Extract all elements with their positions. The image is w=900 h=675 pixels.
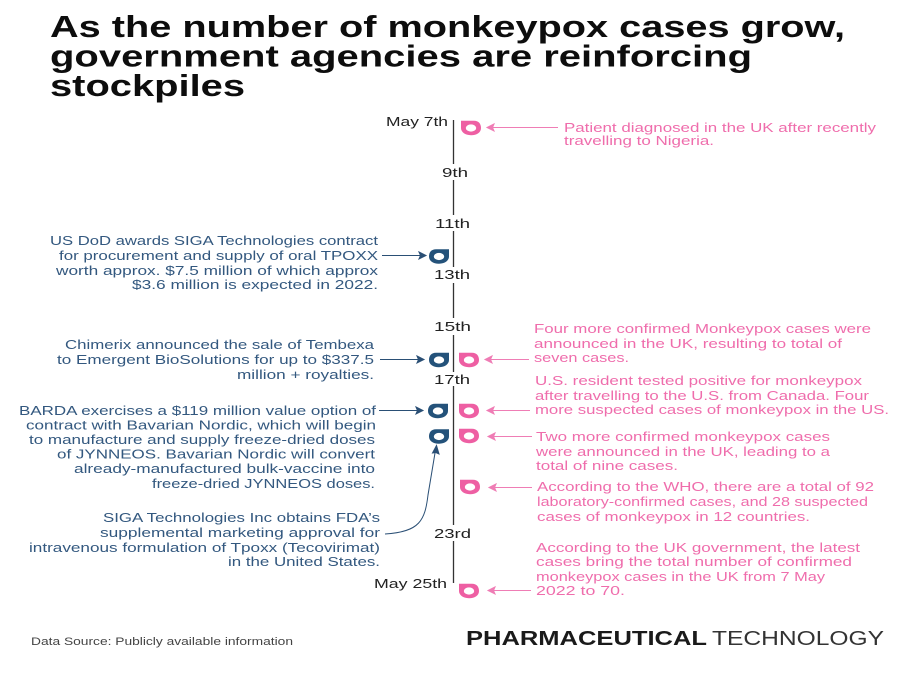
panel: government and industry events — [19, 233, 381, 569]
text: BARDA option: freeze-dried JYNNEOS doses. — [152, 476, 375, 491]
title: stockpiles — [50, 69, 245, 103]
text: BARDA option: to manufacture and supply freeze-dried doses — [29, 432, 376, 447]
text: two more UK cases: were announced in the UK, leading to a — [535, 444, 831, 459]
text: WHO totals: According to the WHO, there are a total of 92 — [537, 479, 874, 494]
text: UK government total — [536, 540, 860, 598]
icons: navy markers — [428, 249, 449, 444]
date labels: May 25th — [374, 576, 447, 591]
text: UK government total: 2022 to 70. — [536, 583, 625, 598]
text: four more UK cases: Four more confirmed Monkeypox cases were — [534, 321, 871, 336]
date labels: 17th — [434, 372, 470, 387]
text: WHO totals: cases of monkeypox in 12 countries. — [537, 509, 810, 524]
text: US resident — [535, 373, 889, 417]
timeline axis — [452, 120, 454, 583]
title: As the number of monkeypox cases grow, — [50, 10, 845, 44]
text: SIGA FDA approval: supplemental marketing approval for — [100, 525, 381, 540]
text: SIGA FDA approval: SIGA Technologies Inc obtains FDA’s — [103, 510, 381, 525]
text: US DoD award: $3.6 million is expected in 2022. — [132, 277, 378, 292]
text: four more UK cases: seven cases. — [534, 350, 629, 365]
title: government agencies are reinforcing — [50, 40, 752, 74]
text: first UK patient — [564, 120, 877, 148]
text: BARDA option — [19, 403, 376, 491]
text: BARDA option: already-manufactured bulk-vaccine into — [74, 461, 375, 476]
text: UK government total: cases bring the total number of confirmed — [536, 554, 852, 569]
data source note: Data Source: Publicly available information — [31, 636, 293, 648]
text: two more UK cases — [535, 429, 831, 473]
text: US DoD award: for procurement and supply of oral TPOXX — [59, 248, 378, 263]
logo: Pharmaceutical Technology: PHARMACEUTICAL — [466, 627, 707, 650]
text: US resident: after travelling to the U.S. from Canada. Four — [535, 388, 870, 403]
text: BARDA option: contract with Bavarian Nordic, which will begin — [26, 418, 376, 432]
title — [50, 10, 845, 103]
text: first UK patient: travelling to Nigeria. — [564, 133, 714, 148]
text: SIGA FDA approval: intravenous formulation of Tpoxx (Tecovirimat) — [29, 540, 380, 555]
text: WHO totals — [537, 479, 874, 524]
text: SIGA FDA approval: in the United States. — [228, 554, 380, 569]
date labels — [374, 114, 471, 591]
text: US resident: more suspected cases of monkeypox in the US. — [535, 402, 889, 417]
text: four more UK cases: announced in the UK, resulting to total of — [534, 336, 842, 351]
date labels: 11th — [435, 216, 470, 231]
panel: case events — [534, 120, 889, 598]
text: BARDA option: of JYNNEOS. Bavarian Nordic will convert — [57, 447, 375, 462]
logo: Pharmaceutical Technology: TECHNOLOGY — [712, 627, 884, 650]
text: BARDA option: BARDA exercises a $119 million value option of — [19, 403, 376, 418]
date labels: 13th — [434, 267, 470, 282]
text: Chimerix sale: million + royalties. — [237, 367, 374, 382]
arrows: pink — [485, 124, 558, 594]
text: two more UK cases: Two more confirmed monkeypox cases — [536, 429, 831, 444]
text: Chimerix sale — [57, 337, 375, 382]
text: SIGA FDA approval — [29, 510, 381, 569]
text: two more UK cases: total of nine cases. — [536, 458, 678, 473]
date labels: May 7th — [386, 114, 448, 129]
icons: pink markers — [459, 121, 481, 598]
text: US DoD award: worth approx. $7.5 million of which approx — [55, 263, 379, 278]
arrows: navy — [379, 252, 439, 534]
date labels: 9th — [442, 165, 468, 180]
text: WHO totals: laboratory-confirmed cases, and 28 suspected — [537, 494, 868, 509]
date labels: 15th — [434, 319, 471, 334]
text: US resident: U.S. resident tested positive for monkeypox — [535, 373, 863, 388]
text: Chimerix sale: Chimerix announced the sale of Tembexa — [65, 337, 375, 352]
date labels: 23rd — [434, 526, 471, 541]
text: UK government total: monkeypox cases in the UK from 7 May — [536, 569, 825, 584]
text: four more UK cases — [534, 321, 871, 365]
text: US DoD award: US DoD awards SIGA Technologies contract — [50, 233, 378, 248]
text: Chimerix sale: to Emergent BioSolutions for up to $337.5 — [57, 352, 374, 367]
text: US DoD award — [50, 233, 379, 292]
logo: Pharmaceutical Technology — [466, 627, 884, 650]
text: first UK patient: Patient diagnosed in the UK after recently — [564, 120, 877, 135]
text: UK government total: According to the UK government, the latest — [536, 540, 860, 555]
